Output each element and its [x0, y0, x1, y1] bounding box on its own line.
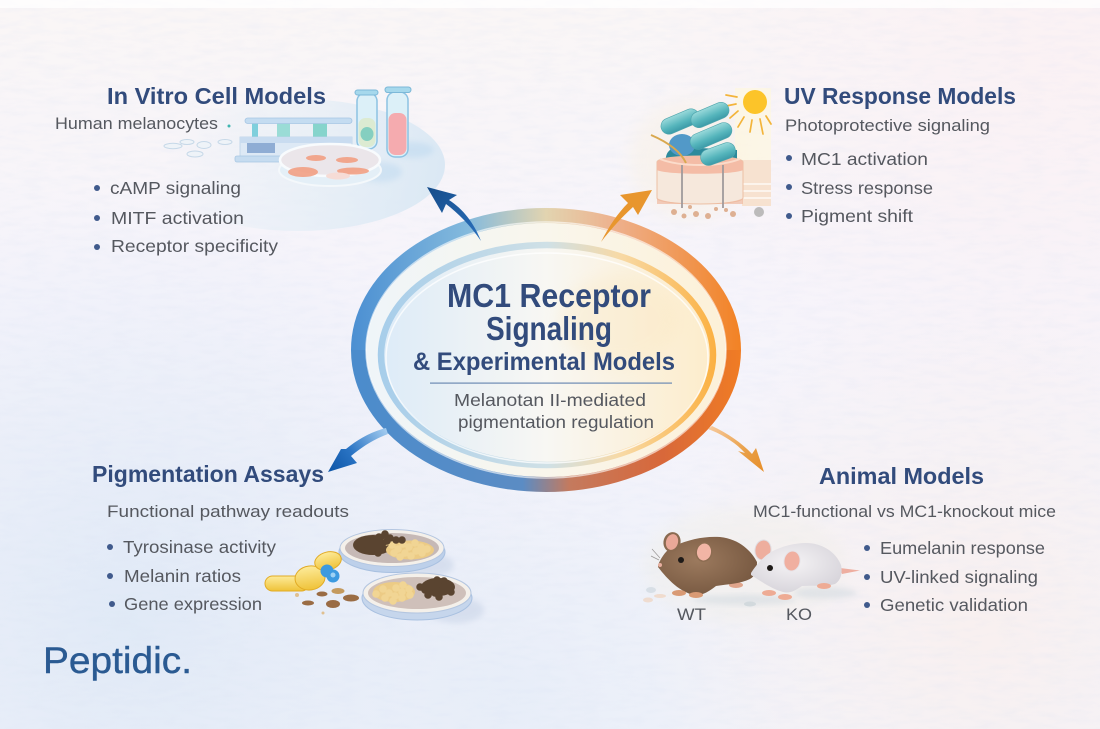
dish two	[362, 573, 472, 620]
illustration: test tubes, rack and petri dish	[151, 87, 445, 231]
bullet list	[786, 149, 933, 226]
dish one	[339, 530, 445, 572]
illustration: WT and KO mice	[643, 507, 860, 623]
heading: Pigmentation Assays	[92, 461, 324, 487]
logo: Peptidic.: Peptidic.	[43, 640, 192, 681]
bullet list: UV-linked signaling	[880, 567, 1038, 587]
bullet list	[107, 537, 276, 614]
subheading: Human melanocytes	[55, 114, 218, 133]
heading: UV Response Models	[784, 83, 1016, 109]
bullet list: cAMP signaling	[110, 178, 241, 198]
panel: in vitro cell models	[55, 83, 445, 256]
outer ring	[358, 216, 734, 485]
divider line	[430, 382, 672, 384]
label: WT: WT	[677, 606, 706, 624]
bullet list: Melanin ratios	[124, 566, 241, 586]
arrow: to animal models	[708, 426, 764, 472]
bullet list: Eumelanin response	[880, 538, 1045, 558]
arrow: to pigmentation assays	[328, 428, 388, 472]
WT mouse	[651, 530, 757, 598]
panel: pigmentation assays	[92, 461, 484, 623]
bullet list: MITF activation	[111, 208, 244, 228]
bullet list: Stress response	[801, 178, 933, 198]
arrow: to in vitro	[427, 187, 481, 241]
center title: MC1 Receptor	[447, 277, 651, 314]
small teal dot	[228, 124, 230, 128]
subheading: Functional pathway readouts	[107, 502, 349, 521]
pigment granules	[295, 588, 359, 614]
panel: animal models	[643, 463, 1056, 624]
subheading: MC1-functional vs MC1-knockout mice	[753, 502, 1056, 521]
bullet list	[864, 538, 1045, 615]
yellow capsules	[265, 549, 343, 592]
central oval	[358, 215, 734, 485]
center title: & Experimental Models	[413, 348, 675, 376]
bullet list: Pigment shift	[801, 206, 913, 226]
center title	[413, 277, 675, 376]
bullet list: Gene expression	[124, 594, 262, 614]
center subtitle: pigmentation regulation	[458, 412, 654, 432]
heading: In Vitro Cell Models	[107, 83, 326, 109]
label: KO: KO	[786, 606, 812, 624]
subheading: Photoprotective signaling	[785, 116, 990, 135]
bullet list: MC1 activation	[801, 149, 928, 169]
bullet list: Tyrosinase activity	[123, 537, 276, 557]
illustration: skin block, capsules and sun	[630, 88, 771, 220]
KO mouse	[751, 539, 860, 600]
heading: Animal Models	[819, 463, 984, 489]
center subtitle: Melanotan II-mediated	[454, 390, 646, 410]
bullet list	[94, 178, 278, 256]
arrow: to UV response	[601, 190, 652, 242]
center title: Signaling	[486, 310, 612, 347]
bullet list: Receptor specificity	[111, 236, 278, 256]
inner ring and fill	[381, 245, 713, 465]
center subtitle	[454, 390, 654, 432]
illustration: assay dishes and yellow capsules	[265, 530, 484, 623]
panel: UV response models	[630, 83, 1016, 226]
bullet list: Genetic validation	[880, 595, 1028, 615]
